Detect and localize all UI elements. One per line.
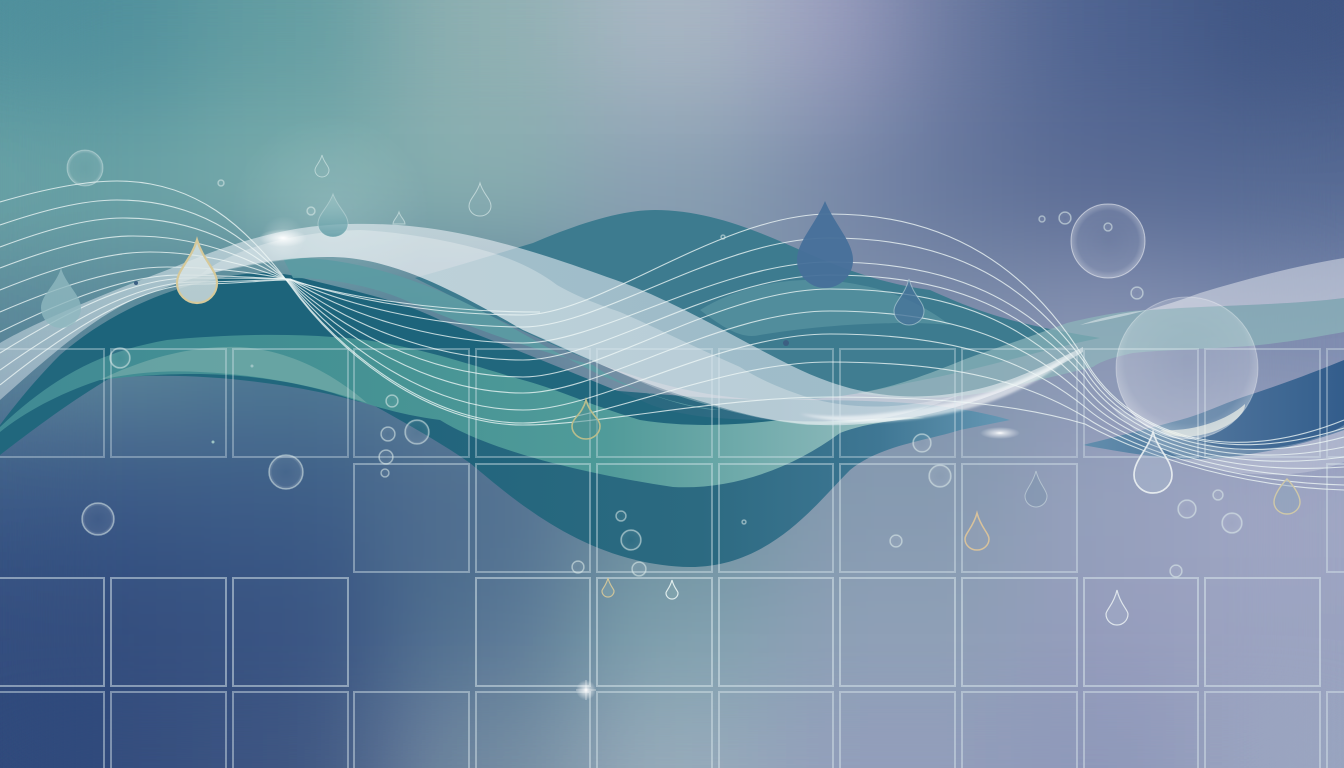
flowing lines <box>0 181 1344 490</box>
drop: blue outlined mid <box>894 279 924 325</box>
wave: upper teal hump <box>415 210 1100 400</box>
drops: tiny lower centre <box>602 578 678 599</box>
dots: small dark specks <box>134 281 789 444</box>
drop: tiny top <box>315 155 329 177</box>
sparkle: ribbon right <box>980 427 1020 439</box>
wave: pale crescent <box>100 347 367 403</box>
wave: brighter ribbon overlay <box>200 230 960 425</box>
drop: gold centre <box>572 400 600 439</box>
drop: large blue <box>797 201 853 288</box>
drop: teal upper <box>318 194 348 237</box>
wave: left dark teal band <box>0 273 790 455</box>
wave: medium teal stripe <box>283 258 720 410</box>
drop: gold outlined left <box>177 240 217 303</box>
wave: navy right band <box>1083 360 1344 459</box>
wave: white translucent ribbon <box>0 224 1083 425</box>
wave: thin bright ribbon edge <box>800 352 1075 422</box>
tile row 3 <box>0 578 1320 686</box>
bubble: large right <box>1116 297 1258 439</box>
tile row 2 <box>354 464 1344 572</box>
glow: halo behind upper sparkle <box>230 115 430 315</box>
drop: slate right <box>1025 471 1047 507</box>
bubble: top left <box>67 150 103 186</box>
glass tile grid <box>0 349 1344 768</box>
drop: tiny on ribbon <box>393 212 405 224</box>
wave: hump inner highlight <box>700 280 950 336</box>
drop: pale bottom right <box>1106 590 1128 625</box>
sparkle: lower grid <box>576 680 596 700</box>
drop: bright large right <box>1134 432 1172 493</box>
drop: gold far right <box>1274 479 1300 514</box>
tile row 1 <box>0 349 1344 457</box>
sparkle: upper left <box>259 216 307 260</box>
drop: small outlined top <box>469 183 491 216</box>
wave: upper right pale band <box>1080 258 1344 325</box>
drop: pale left <box>41 268 81 328</box>
wave: light teal right band <box>857 298 1344 398</box>
bubbles: small scattered <box>82 180 1242 577</box>
tile row 4 <box>0 692 1344 768</box>
bubble: upper right <box>1071 204 1145 278</box>
wave: mint band <box>0 335 925 487</box>
drop: gold lower right <box>965 513 989 550</box>
wave: deep lower teal swell <box>330 378 1010 567</box>
wave: right pale tail <box>1110 405 1344 475</box>
